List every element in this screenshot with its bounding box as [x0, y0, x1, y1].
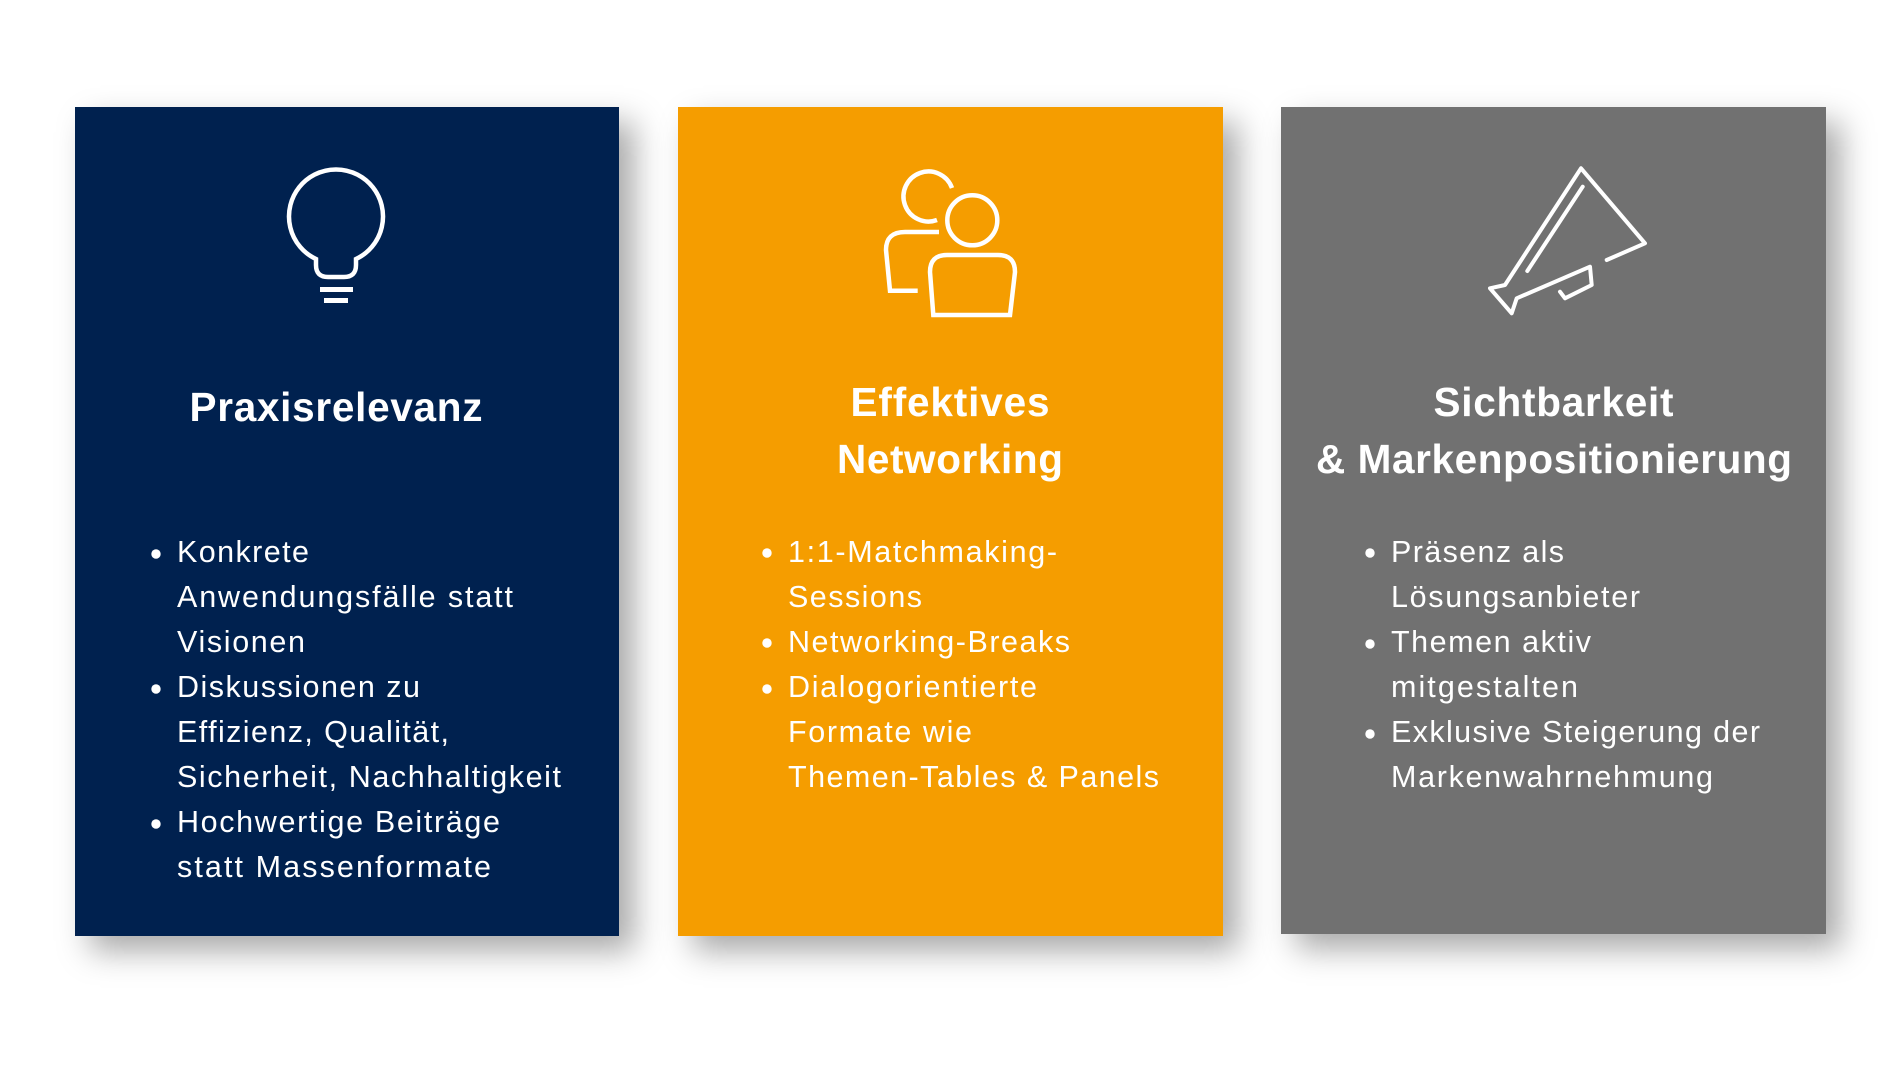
list: Networking points: Formate wie: [788, 715, 972, 749]
list: Praxisrelevanz points: [151, 535, 562, 884]
list: Networking points: 1:1-Matchmaking-: [788, 535, 1057, 569]
heading: Sichtbarkeit & Markenpositionierung: & Markenpositionierung: [1316, 436, 1792, 482]
list: Sichtbarkeit points: Themen aktiv: [1391, 625, 1592, 659]
list: Sichtbarkeit points: [1365, 535, 1760, 794]
icon: light bulb: [289, 169, 383, 303]
panel: Praxisrelevanz: [75, 107, 619, 936]
panel: Sichtbarkeit & Markenpositionierung: [1281, 107, 1826, 934]
list: Praxisrelevanz points: Konkrete: [177, 535, 309, 569]
heading: Sichtbarkeit & Markenpositionierung: [1316, 379, 1792, 482]
list: Sichtbarkeit points: Präsenz als: [1391, 535, 1564, 569]
list: Sichtbarkeit points: mitgestalten: [1391, 670, 1578, 704]
heading: Sichtbarkeit & Markenpositionierung: Sichtbarkeit: [1434, 379, 1674, 425]
heading: Effektives Networking: Effektives: [850, 379, 1050, 425]
list: Sichtbarkeit points: Exklusive Steigerung der: [1391, 715, 1760, 749]
list: Praxisrelevanz points: Effizienz, Qualität,: [177, 715, 449, 749]
list: Sichtbarkeit points: Markenwahrnehmung: [1391, 760, 1713, 794]
list: Networking points: [762, 535, 1159, 794]
list: Networking points: Sessions: [788, 580, 922, 614]
list: Praxisrelevanz points: Anwendungsfälle statt: [177, 580, 514, 614]
heading: Effektives Networking: [837, 379, 1063, 482]
list: Praxisrelevanz points: Diskussionen zu: [177, 670, 420, 704]
heading: Praxisrelevanz: Praxisrelevanz: [190, 384, 482, 430]
panel: Effektives Networking: [678, 107, 1223, 936]
heading: Effektives Networking: Networking: [837, 436, 1063, 482]
icon: two people: [886, 171, 1015, 315]
list: Praxisrelevanz points: Visionen: [177, 625, 305, 659]
list: Praxisrelevanz points: statt Massenformate: [177, 850, 491, 884]
icon: megaphone: [1490, 168, 1645, 313]
list: Networking points: Networking-Breaks: [788, 625, 1070, 659]
list: Networking points: Themen-Tables & Panels: [788, 760, 1159, 794]
list: Praxisrelevanz points: Sicherheit, Nachhaltigkeit: [177, 760, 562, 794]
list: Networking points: Dialogorientierte: [788, 670, 1037, 704]
list: Praxisrelevanz points: Hochwertige Beiträge: [177, 805, 500, 839]
list: Sichtbarkeit points: Lösungsanbieter: [1391, 580, 1640, 614]
